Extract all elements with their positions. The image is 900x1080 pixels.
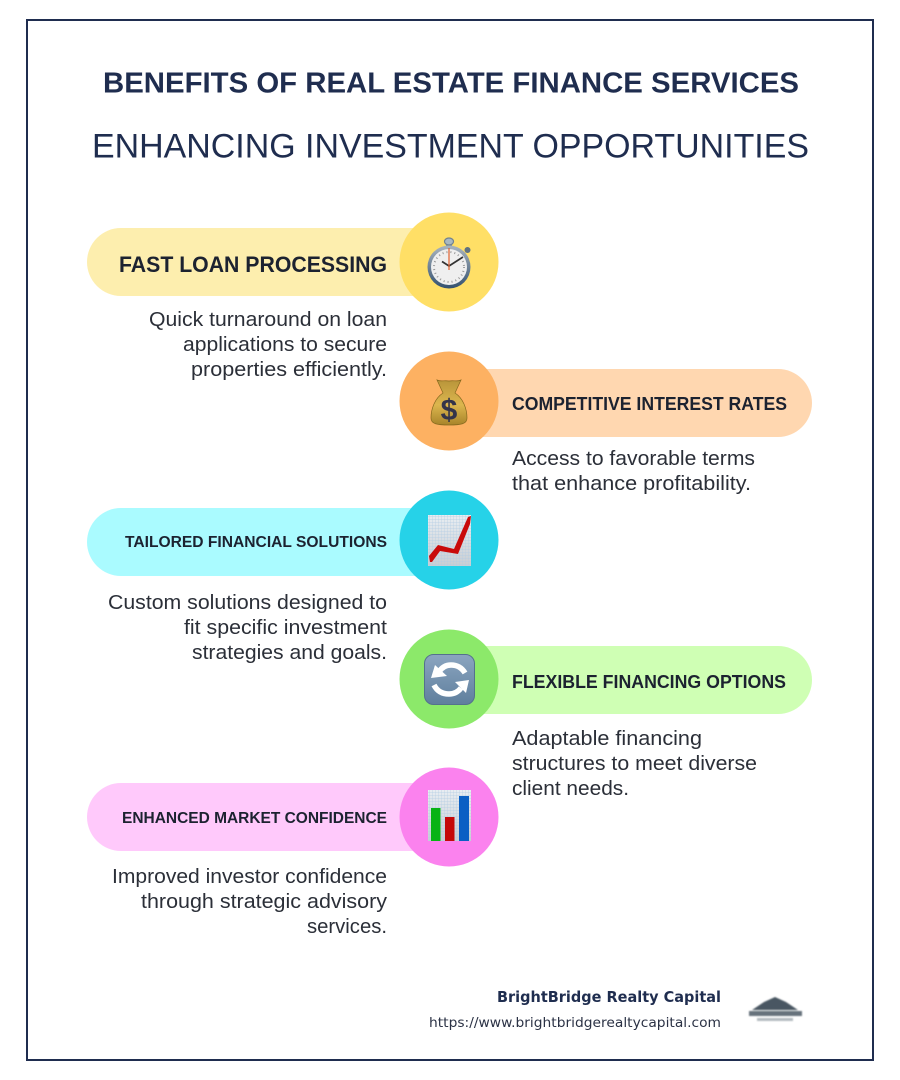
- label pill: [87, 508, 457, 576]
- footer: website url: https://www.brightbridgerealtycapital.com: [429, 1016, 721, 1031]
- icon: bar chart: [428, 790, 471, 841]
- icon: money bag: $: [441, 394, 458, 427]
- icon circle: [400, 352, 498, 450]
- icon: rising chart: [428, 515, 471, 566]
- panel: competitive interest rates: [400, 352, 812, 495]
- description: Adaptable financing: [512, 728, 702, 750]
- description: [149, 309, 387, 381]
- description: Custom solutions designed to: [108, 592, 387, 614]
- icon circle: [400, 212, 498, 312]
- description: applications to secure: [183, 334, 387, 356]
- description: services.: [307, 916, 387, 938]
- footer: logo: [749, 997, 802, 1021]
- footer: company name: BrightBridge Realty Capital: [497, 988, 721, 1006]
- icon circle: [400, 490, 498, 590]
- description: [512, 448, 755, 495]
- heading: TAILORED FINANCIAL SOLUTIONS: [125, 534, 387, 551]
- icon: money bag: [431, 380, 467, 427]
- panel: fast loan processing: [87, 212, 498, 381]
- description: that enhance profitability.: [512, 473, 751, 495]
- description: Improved investor confidence: [112, 866, 387, 888]
- panel: flexible financing options: [400, 630, 812, 800]
- description: structures to meet diverse: [512, 753, 757, 775]
- label pill: [87, 783, 457, 851]
- heading: FAST LOAN PROCESSING: [119, 252, 387, 277]
- subtitle: ENHANCING INVESTMENT OPPORTUNITIES: [92, 128, 809, 166]
- heading: ENHANCED MARKET CONFIDENCE: [122, 810, 387, 827]
- icon: stopwatch: [428, 238, 470, 288]
- label pill: [442, 369, 812, 437]
- description: [112, 866, 387, 938]
- icon circle: [400, 630, 498, 728]
- title: BENEFITS OF REAL ESTATE FINANCE SERVICES: [103, 68, 799, 100]
- description: Access to favorable terms: [512, 448, 755, 470]
- description: fit specific investment: [184, 617, 387, 639]
- description: Quick turnaround on loan: [149, 309, 387, 331]
- description: through strategic advisory: [141, 891, 387, 913]
- heading: FLEXIBLE FINANCING OPTIONS: [512, 672, 786, 692]
- description: client needs.: [512, 778, 629, 800]
- description: properties efficiently.: [191, 359, 387, 381]
- panel: tailored financial solutions: [87, 490, 498, 664]
- description: strategies and goals.: [192, 642, 387, 664]
- icon: refresh arrows: [424, 654, 474, 704]
- panel: enhanced market confidence: [87, 768, 498, 938]
- label pill: [442, 646, 812, 714]
- label pill: [87, 228, 457, 296]
- icon circle: [400, 768, 498, 866]
- heading: COMPETITIVE INTEREST RATES: [512, 394, 787, 414]
- description: [108, 592, 387, 664]
- description: [512, 728, 757, 800]
